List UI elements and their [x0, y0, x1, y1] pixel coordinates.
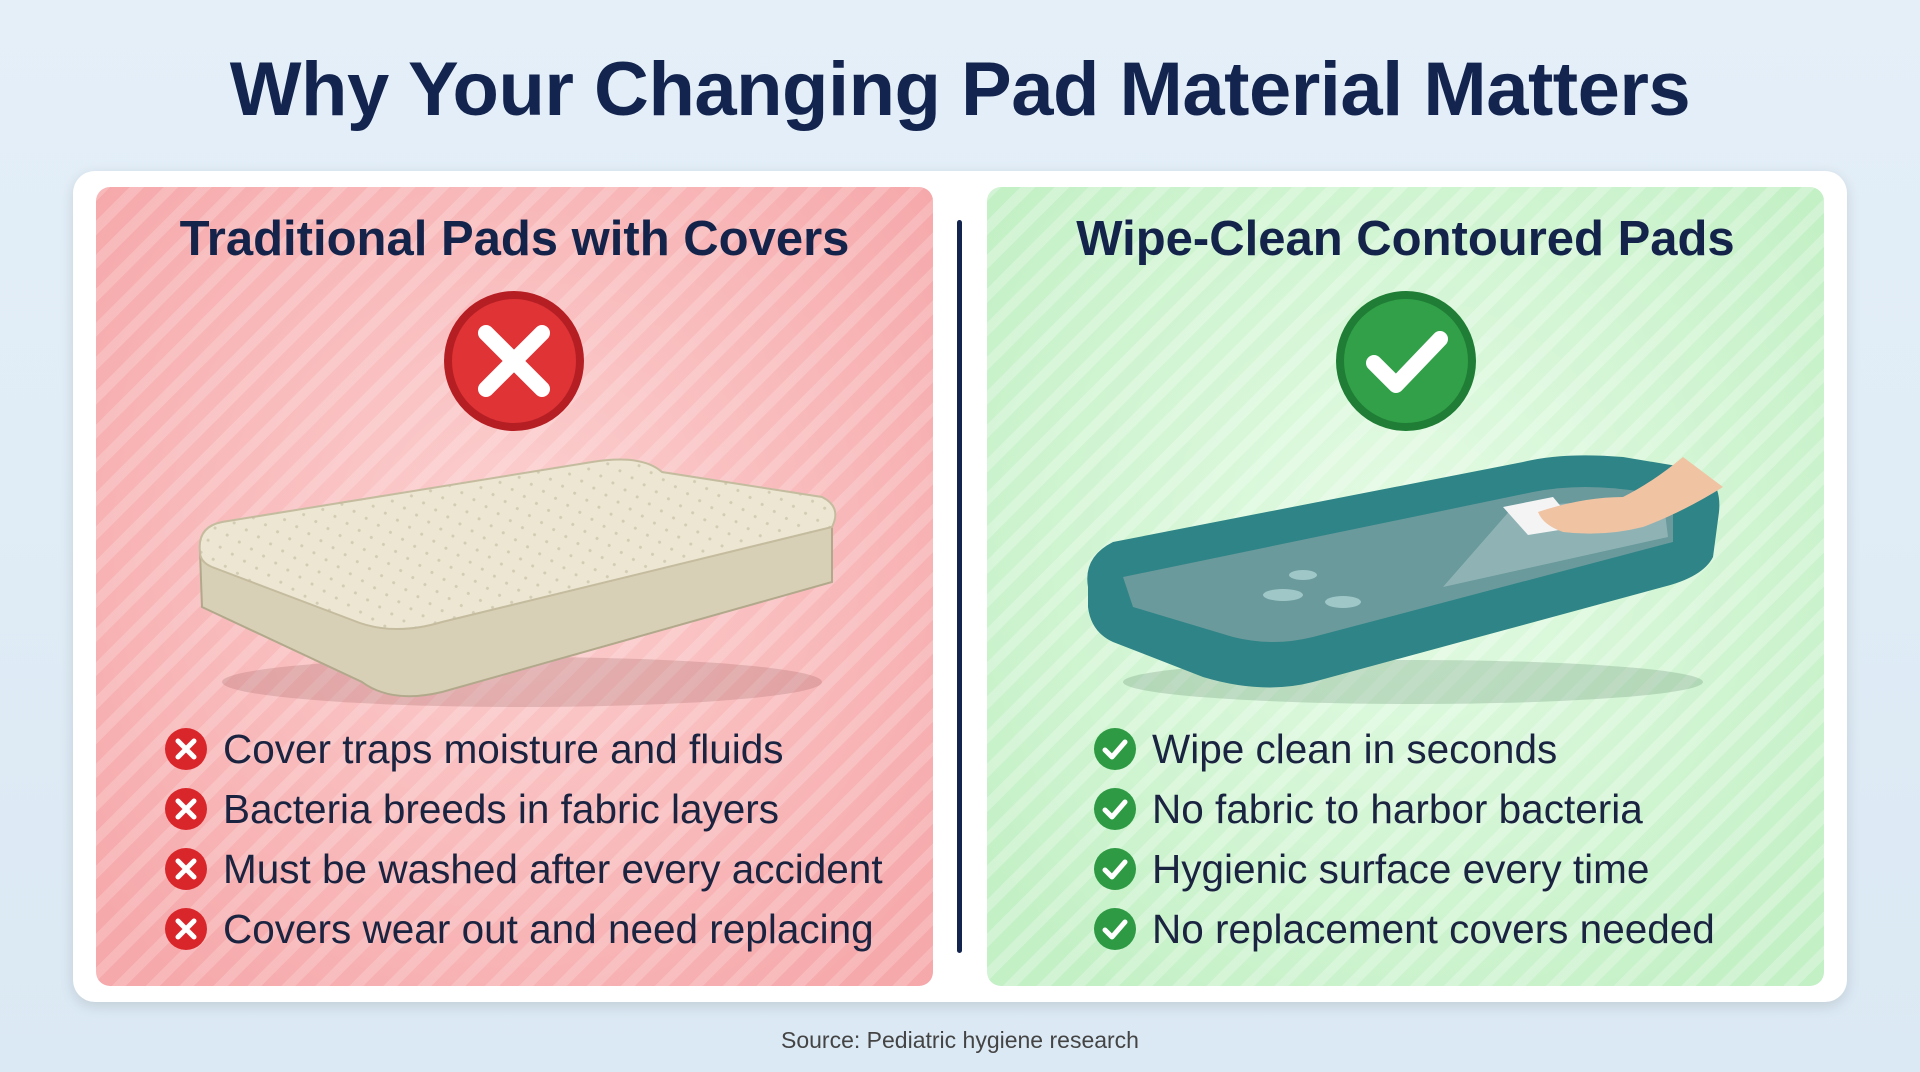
item: Covers wear out and need replacing: [223, 906, 874, 952]
item: Hygienic surface every time: [1152, 846, 1649, 892]
item: No fabric to harbor bacteria: [1152, 786, 1643, 832]
divider: [957, 220, 962, 953]
item: Must be washed after every accident: [223, 846, 883, 892]
item: No replacement covers needed: [1152, 906, 1715, 952]
icon: red X: [444, 291, 584, 431]
heading: wipe-clean: Wipe-Clean Contoured Pads: [1076, 212, 1735, 266]
item: Cover traps moisture and fluids: [223, 726, 784, 772]
card background: [73, 171, 1847, 1002]
source note: Source: Pediatric hygiene research: [781, 1027, 1139, 1053]
list: benefits: [1094, 726, 1715, 952]
icon: green check: [1336, 291, 1476, 431]
list: drawbacks: [165, 726, 883, 952]
heading: traditional: Traditional Pads with Covers: [180, 212, 849, 266]
item: Wipe clean in seconds: [1152, 726, 1557, 772]
panel: traditional pads: [96, 187, 933, 986]
illustration: contoured pad with hand: [1087, 455, 1723, 704]
illustration: quilted pad: [198, 458, 836, 707]
title: Why Your Changing Pad Material Matters: [230, 47, 1690, 132]
panel: wipe-clean pads: [987, 187, 1824, 986]
item: Bacteria breeds in fabric layers: [223, 786, 779, 832]
